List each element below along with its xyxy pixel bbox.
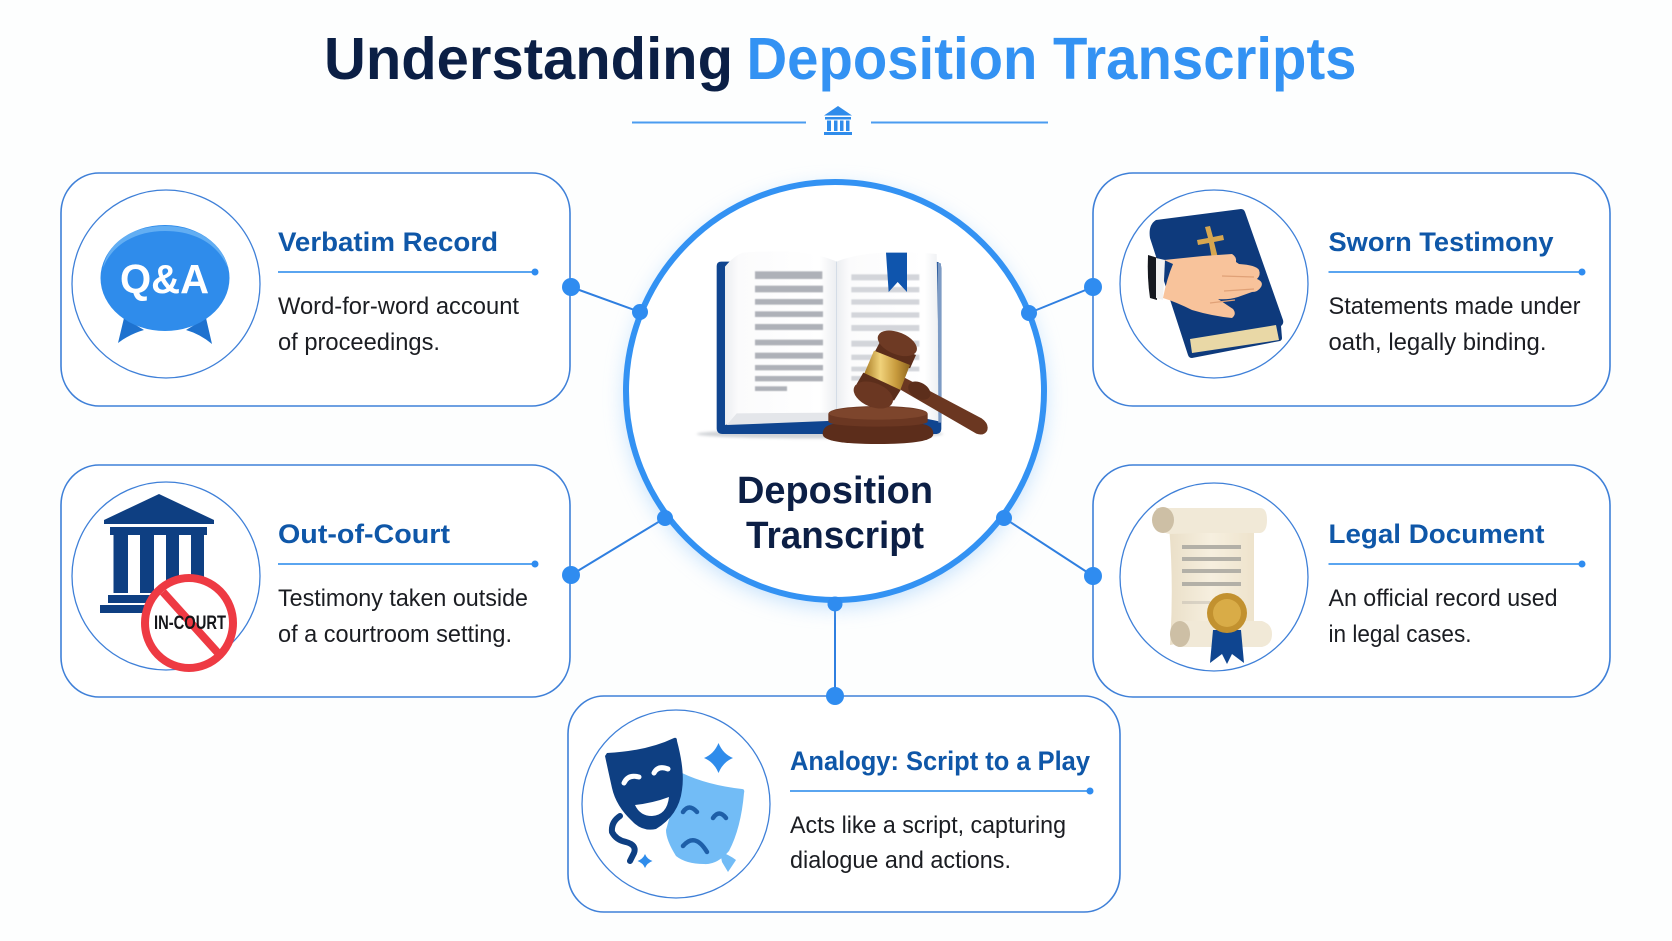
description: of a courtroom setting. bbox=[278, 621, 512, 648]
connector nodes bbox=[562, 278, 1102, 705]
description bbox=[1328, 585, 1558, 648]
heading rule bbox=[1328, 268, 1586, 276]
heading: Out-of-Court bbox=[278, 519, 450, 549]
title bbox=[324, 26, 1356, 92]
connectors bbox=[571, 287, 1093, 696]
icon: Q&A speech bubble bbox=[100, 225, 230, 344]
description: dialogue and actions. bbox=[790, 847, 1011, 874]
title: Deposition Transcripts bbox=[746, 26, 1356, 92]
central label: Deposition bbox=[737, 470, 933, 512]
panel: verbatim record bbox=[61, 173, 570, 406]
description bbox=[278, 585, 528, 648]
description: in legal cases. bbox=[1328, 621, 1472, 648]
heading rule bbox=[1328, 560, 1586, 568]
heading: Sworn Testimony bbox=[1328, 227, 1554, 257]
icon: Q&A speech bubble: Q&A bbox=[120, 256, 209, 302]
heading rule bbox=[278, 268, 538, 276]
icon: scroll with seal bbox=[1152, 507, 1272, 664]
heading rule bbox=[278, 560, 538, 568]
description: An official record used bbox=[1328, 585, 1558, 612]
description: Word-for-word account bbox=[278, 293, 519, 320]
icon: theatre masks bbox=[605, 738, 744, 872]
description: Statements made under bbox=[1328, 293, 1580, 320]
icon: courthouse with no-entry sign: IN-COURT bbox=[154, 613, 226, 634]
description bbox=[790, 812, 1066, 874]
description: oath, legally binding. bbox=[1328, 329, 1546, 356]
central label: Transcript bbox=[746, 515, 924, 557]
panel: analogy bbox=[568, 696, 1120, 912]
heading: Legal Document bbox=[1328, 519, 1545, 549]
description bbox=[1328, 293, 1580, 356]
title: Understanding bbox=[324, 26, 733, 92]
description: Acts like a script, capturing bbox=[790, 812, 1066, 839]
icon: courthouse with no-entry sign bbox=[100, 494, 233, 668]
heading rule bbox=[790, 788, 1094, 794]
heading: Analogy: Script to a Play bbox=[790, 746, 1090, 776]
icon: hand on bible bbox=[1148, 209, 1283, 358]
central circle bbox=[626, 182, 1044, 606]
illustration: open book and gavel bbox=[697, 251, 988, 444]
panel: legal document bbox=[1093, 465, 1610, 697]
panel: out-of-court bbox=[61, 465, 570, 697]
description: Testimony taken outside bbox=[278, 585, 528, 612]
description bbox=[278, 293, 519, 356]
description: of proceedings. bbox=[278, 329, 440, 356]
central label bbox=[737, 470, 933, 557]
heading: Verbatim Record bbox=[278, 227, 498, 257]
panel: sworn testimony bbox=[1093, 173, 1610, 406]
title divider with courthouse icon bbox=[632, 106, 1048, 135]
